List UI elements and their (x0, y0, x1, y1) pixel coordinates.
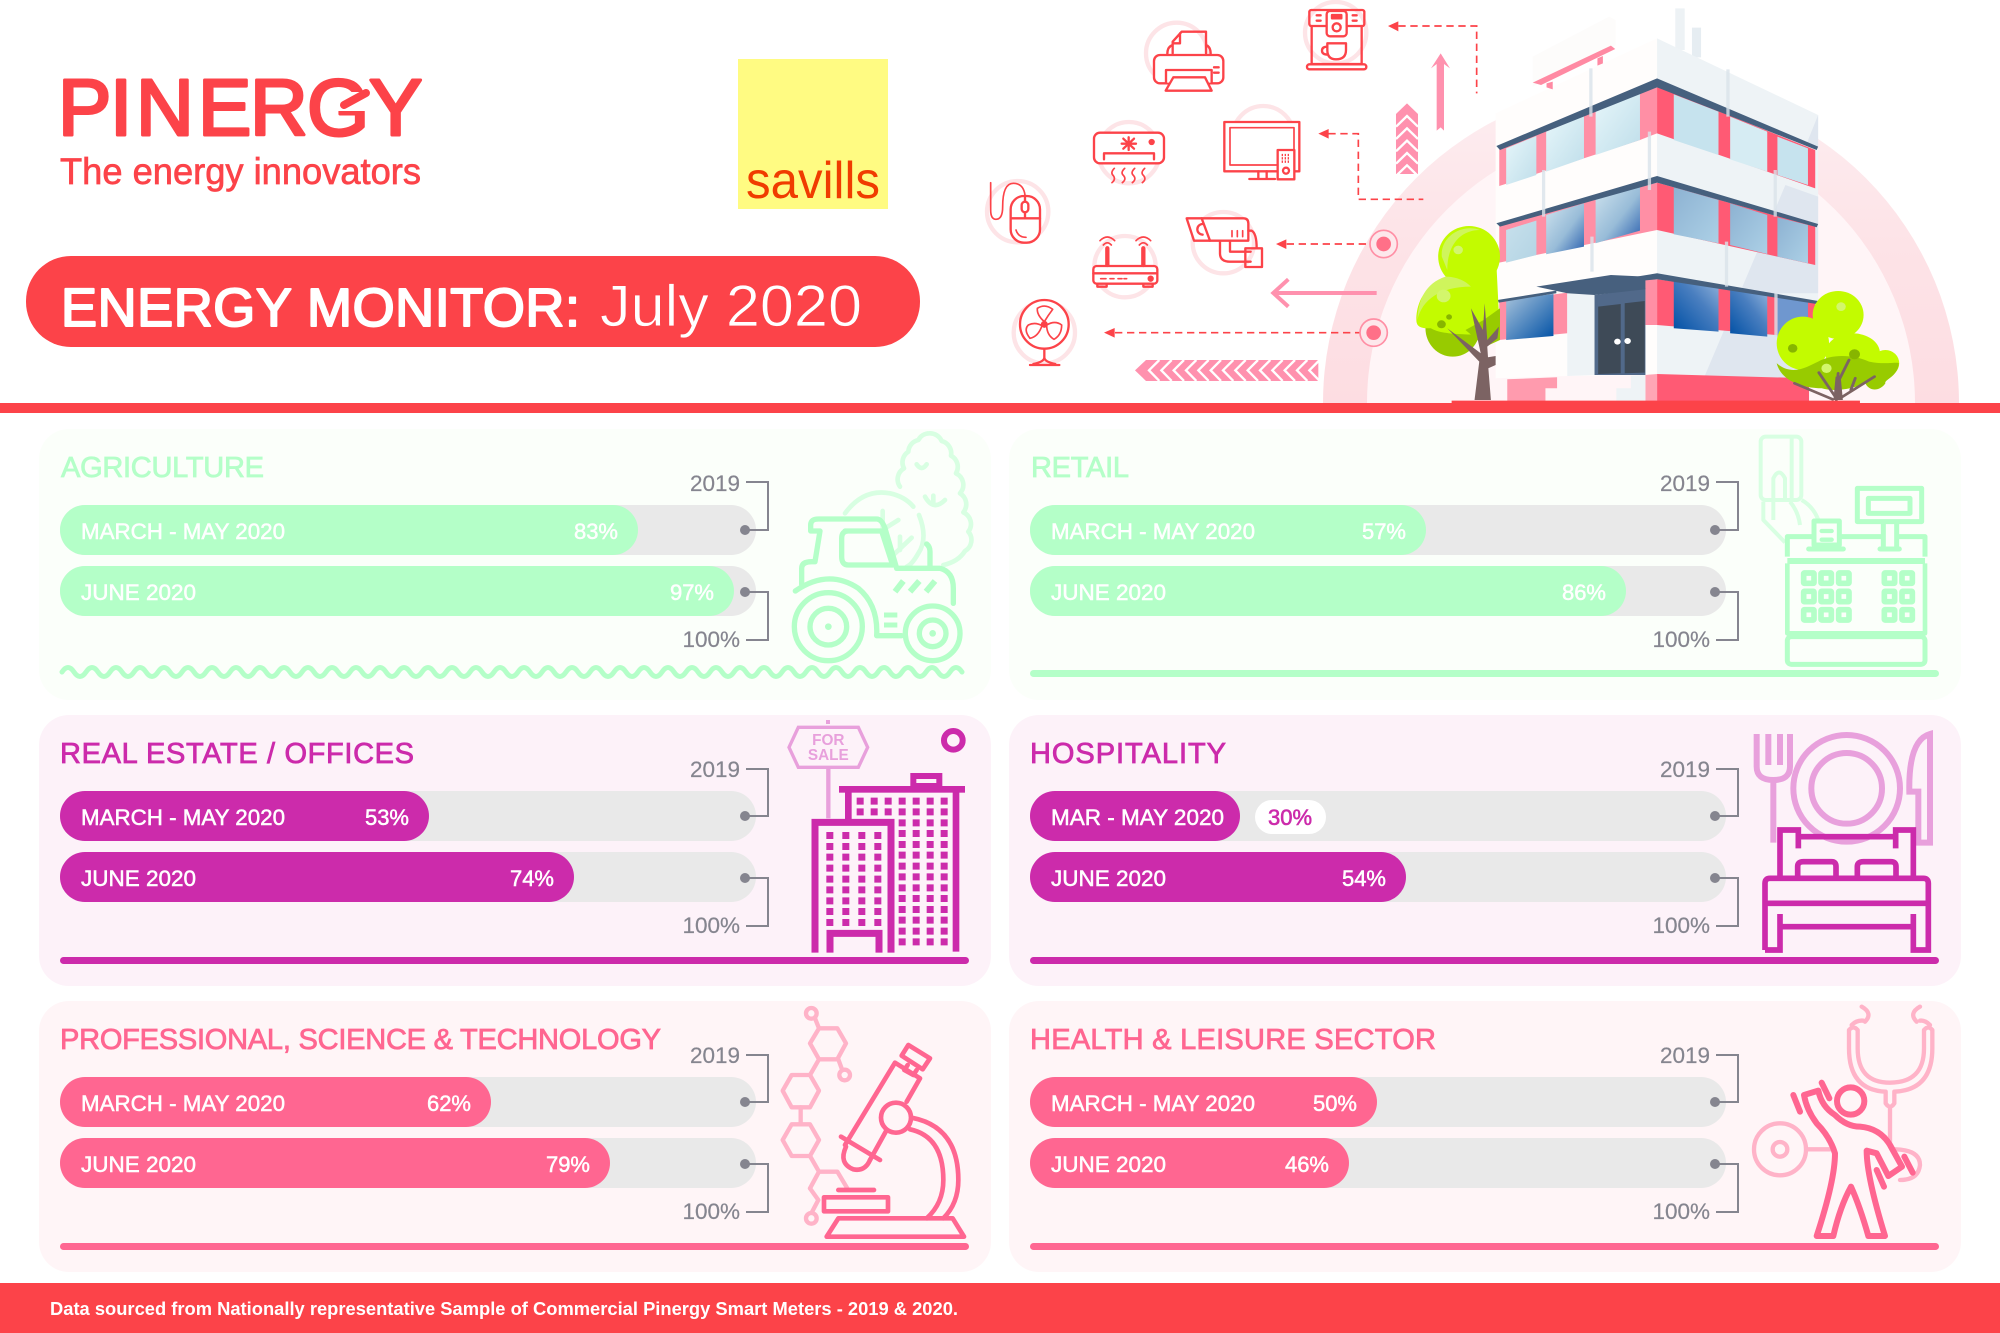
entrance (1567, 293, 1595, 376)
bar: March-May: 57% (1362, 519, 1406, 544)
bar: June: 86% (1562, 580, 1606, 605)
scale bracket (1652, 471, 1738, 652)
bar: June (60, 1138, 756, 1188)
scale bracket (682, 1043, 768, 1224)
footer: Data sourced from Nationally representative Sample of Commercial Pinergy Smart Meters - 2019 & 2020. (50, 1299, 958, 1319)
icon: security camera (1187, 218, 1262, 267)
icon: television (1224, 122, 1299, 179)
panel: hospitality (1009, 715, 1961, 986)
bar: June: JUNE 2020 (1051, 580, 1166, 605)
keypad (1804, 573, 1912, 620)
icon: office buildings with for sale sign: SALE (808, 747, 849, 764)
bar: June (1030, 852, 1726, 902)
scale bracket: 100% (682, 627, 740, 652)
scale bracket (682, 471, 768, 652)
scale bracket: 100% (1652, 1199, 1710, 1224)
icon: router (1093, 237, 1157, 287)
bar: March-May (60, 505, 756, 555)
bar: June: JUNE 2020 (81, 1152, 196, 1177)
icon: office buildings with for sale sign (789, 720, 965, 953)
heading: PROFESSIONAL, SCIENCE & TECHNOLOGY (60, 1024, 661, 1056)
bar: March-May: MAR - MAY 2020 (1051, 805, 1224, 830)
icon: tractor and trees (794, 433, 971, 661)
bar: June (60, 566, 756, 616)
bar: June: 79% (546, 1152, 590, 1177)
illustration: left tree (1416, 226, 1500, 400)
front building windows (826, 832, 833, 926)
icon halos (987, 2, 1366, 363)
heading: HEALTH & LEISURE SECTOR (1030, 1024, 1436, 1056)
scale bracket: 100% (682, 913, 740, 938)
bar: June: 46% (1285, 1152, 1329, 1177)
scale bracket: 2019 (1660, 757, 1710, 782)
ground line (1030, 670, 1939, 677)
bar: March-May: MARCH - MAY 2020 (81, 805, 285, 830)
bar: March-May (1030, 1077, 1726, 1127)
ground line (60, 957, 969, 964)
bar: March-May: MARCH - MAY 2020 (81, 519, 285, 544)
icon: microscope and molecules (783, 1008, 964, 1237)
icon: athlete, weights and stethoscope (1754, 1007, 1932, 1236)
floor 3 (1657, 279, 1815, 338)
panel: professional, science & technology (39, 1001, 991, 1272)
bar: June: JUNE 2020 (1051, 1152, 1166, 1177)
bar: March-May: MARCH - MAY 2020 (1051, 1091, 1255, 1116)
bar: June: JUNE 2020 (1051, 866, 1166, 891)
bar: March-May: 83% (574, 519, 618, 544)
wordmark: PINERGY (58, 63, 422, 152)
heading: AGRICULTURE (61, 452, 264, 484)
panel: retail (1009, 429, 1961, 700)
scale bracket (682, 757, 768, 938)
bar: March-May: 53% (365, 805, 409, 830)
scale bracket: 2019 (690, 757, 740, 782)
icon: air conditioner (1094, 133, 1164, 183)
illustration: appliances and flow arrows (987, 2, 1477, 381)
scale bracket: 100% (1652, 913, 1710, 938)
arrow: pink chevrons left (1135, 360, 1320, 381)
arrow: to camera with node (1276, 230, 1397, 258)
bar: March-May (1030, 505, 1726, 555)
title banner: ENERGY MONITOR: (61, 278, 580, 338)
floor 1 (1499, 87, 1657, 186)
arrow: to television (1318, 129, 1423, 199)
illustration: building (1496, 8, 1818, 402)
ground line (1030, 957, 1939, 964)
tagline: The energy innovators (60, 151, 421, 192)
panel: agriculture (39, 429, 991, 700)
icon: cash register and card (1761, 437, 1925, 664)
icon: office buildings with for sale sign: FOR (812, 732, 845, 749)
scale bracket: 2019 (690, 471, 740, 496)
bar: June: 97% (670, 580, 714, 605)
bar: March-May: 30% (1268, 805, 1312, 830)
bar: June: JUNE 2020 (81, 866, 196, 891)
header divider (0, 403, 2000, 413)
panel: real estate (39, 715, 991, 986)
arrow: pink chevrons up (1396, 103, 1418, 176)
heading: REAL ESTATE / OFFICES (60, 738, 414, 770)
icon: mouse (991, 183, 1040, 243)
logo: Savills: savills (746, 152, 880, 210)
scale bracket: 2019 (1660, 471, 1710, 496)
panel: health and leisure (1009, 1001, 1961, 1272)
illustration: right tree (1452, 291, 1899, 404)
bar: June (1030, 566, 1726, 616)
bar: March-May: 50% (1313, 1091, 1357, 1116)
scale bracket: 2019 (690, 1043, 740, 1068)
scale bracket: 100% (1652, 627, 1710, 652)
bar: March-May: 62% (427, 1091, 471, 1116)
icon: fan (1020, 300, 1069, 365)
bar: March-May (60, 1077, 756, 1127)
bar: March-May (1030, 791, 1726, 841)
title banner (26, 256, 920, 347)
bar: June (60, 852, 756, 902)
base (1657, 374, 1809, 402)
bar: June: 54% (1342, 866, 1386, 891)
title banner: July 2020 (600, 274, 862, 339)
arrow: pink up (1431, 53, 1450, 131)
bar: June: 74% (510, 866, 554, 891)
bar: March-May: MARCH - MAY 2020 (1051, 519, 1255, 544)
bar: June: JUNE 2020 (81, 580, 196, 605)
illustration: halo behind building (1323, 85, 1959, 403)
scale bracket (1652, 757, 1738, 938)
arrow: to fan with node (1104, 319, 1387, 346)
icon: printer (1154, 32, 1223, 91)
G needle detail (338, 92, 368, 111)
icon: coffee machine (1307, 10, 1366, 69)
bar: June (1030, 1138, 1726, 1188)
icon: bed and place setting (1757, 734, 1930, 950)
ground line (60, 1243, 969, 1250)
bar: March-May: MARCH - MAY 2020 (81, 1091, 285, 1116)
scale bracket: 2019 (1660, 1043, 1710, 1068)
floor 2 (1499, 183, 1657, 263)
logo: Pinergy (58, 63, 422, 192)
bar: March-May (60, 791, 756, 841)
heading: HOSPITALITY (1030, 738, 1226, 770)
ground line (1030, 1243, 1939, 1250)
footer (0, 1283, 2000, 1333)
scale bracket: 100% (682, 1199, 740, 1224)
scale bracket (1652, 1043, 1738, 1224)
arrow: pink left (1273, 279, 1377, 307)
pipes (1544, 68, 1776, 337)
rear building windows (857, 798, 892, 815)
arrow: to coffee machine (1388, 21, 1477, 93)
heading: RETAIL (1031, 452, 1129, 484)
logo: Savills (738, 59, 888, 210)
wavy ground (62, 668, 962, 676)
